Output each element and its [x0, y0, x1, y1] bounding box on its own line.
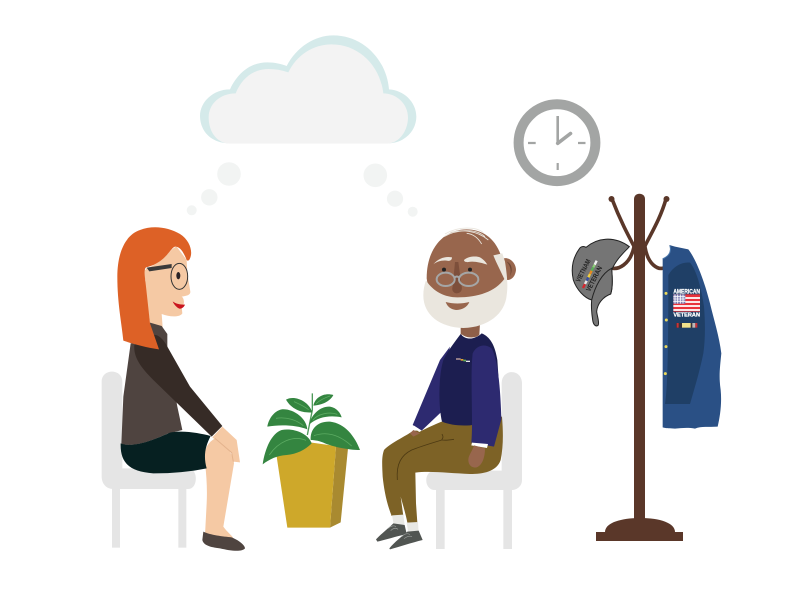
plant in pot: [263, 393, 360, 528]
man: head: [427, 229, 505, 298]
jacket collar highlight: [663, 246, 670, 259]
man: eyes: [442, 268, 472, 272]
woman: skirt: [121, 432, 211, 473]
pot side: [330, 445, 348, 528]
rack: base plate: [596, 532, 683, 541]
woman: shoe: [202, 532, 245, 551]
man: hand: [468, 445, 485, 467]
flag patch: AMERICAN: [673, 290, 700, 296]
man seated: [376, 228, 516, 549]
woman: hair: [117, 227, 191, 349]
man: socks: [392, 515, 405, 526]
thought bubbles: left: [187, 162, 241, 215]
woman: finger line: [215, 438, 233, 462]
man: eyebrows: [433, 257, 452, 264]
man: beard: [423, 253, 507, 328]
cap text: VIETNAM: [575, 258, 593, 284]
man: trousers: [382, 417, 503, 523]
jacket inner panel: [665, 263, 705, 404]
woman seated: [117, 227, 245, 551]
rack: base dome: [605, 518, 675, 532]
man: hair lines: [444, 228, 488, 244]
man: collar: [461, 334, 476, 342]
thought bubbles: right: [364, 164, 418, 217]
woman: glasses: [147, 263, 188, 289]
man: hand on knee: [410, 430, 420, 437]
woman: ear: [140, 270, 150, 280]
rack: pole: [634, 194, 645, 525]
service ribbon: [676, 323, 697, 328]
man: far sleeve: [413, 347, 450, 431]
woman: leg: [205, 438, 234, 538]
cap ribbon: [583, 261, 597, 288]
veteran jacket: [663, 245, 721, 429]
man: cuff near-left: [413, 426, 422, 432]
flag patch: [673, 290, 700, 318]
leaves: [263, 394, 360, 464]
right chair: [426, 372, 522, 549]
flag patch: VETERAN: [673, 312, 700, 318]
left chair: [102, 372, 196, 548]
woman: neck and face: [145, 247, 190, 327]
leaf veins: [269, 396, 352, 455]
man: glasses: [437, 273, 478, 286]
woman: vest: [121, 323, 182, 445]
man: shoes: [376, 523, 407, 542]
man: sweater: [439, 333, 501, 426]
woman: lips: [173, 301, 185, 309]
man: nose: [452, 262, 462, 293]
man: cuff: [471, 443, 488, 448]
coat rack: [596, 194, 683, 541]
pot front: [277, 442, 336, 528]
man: trouser crease: [397, 434, 454, 480]
man: mouth: [446, 302, 469, 310]
man: ear: [503, 258, 516, 280]
man: near sleeve: [471, 346, 501, 447]
woman: hand: [212, 427, 240, 462]
man: badge ribbon: [456, 358, 470, 362]
thought cloud: [200, 35, 416, 144]
wall clock: [519, 104, 595, 181]
woman: sleeve: [134, 335, 222, 437]
jacket buttons: [664, 292, 668, 375]
jacket body: [663, 245, 721, 429]
veteran cap: VETERAN: [586, 265, 604, 293]
man: neck: [461, 323, 480, 341]
plant stem: [307, 393, 312, 435]
rack: arms: [611, 199, 666, 268]
veteran cap: [572, 239, 629, 326]
